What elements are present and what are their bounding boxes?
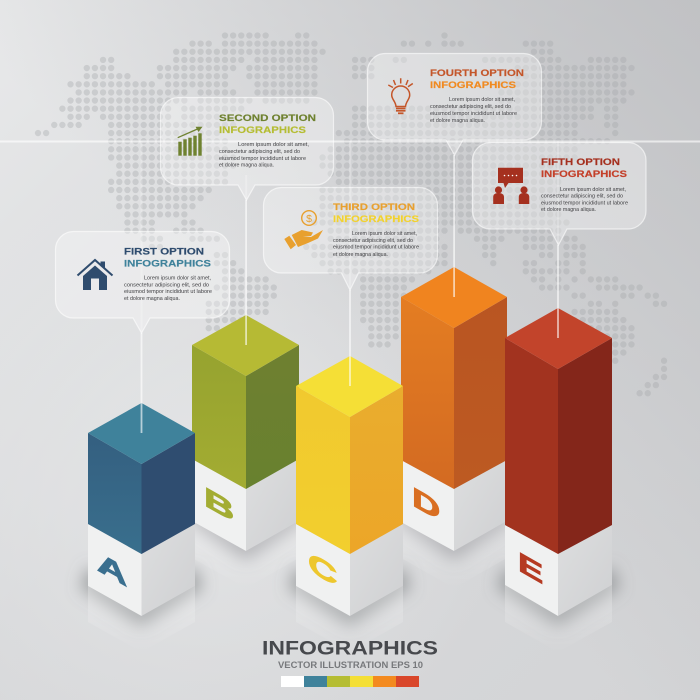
callout: fourth option: Lorem ipsum dolor sit amet,	[449, 97, 515, 103]
callout: fourth option: FOURTH OPTION	[430, 68, 524, 78]
callout: fourth option: et dolore magna aliqua.	[430, 118, 485, 124]
callout: second option: Lorem ipsum dolor sit amet,	[238, 142, 309, 148]
callout: fifth option	[472, 142, 646, 245]
bar A: A	[97, 546, 127, 593]
callout: fifth option: INFOGRAPHICS	[541, 169, 627, 179]
callout: first option: FIRST OPTION	[124, 246, 204, 256]
callout: third option: Lorem ipsum dolor sit amet,	[352, 231, 417, 237]
bar A	[80, 403, 203, 652]
colour strip	[281, 676, 419, 687]
callout: first option	[55, 231, 230, 333]
callout: third option: INFOGRAPHICS	[333, 214, 419, 224]
callout: third option: THIRD OPTION	[333, 202, 415, 212]
callout: fifth option: eiusmod tempor incididunt ut labore	[541, 200, 628, 206]
callout: fifth option: et dolore magna aliqua.	[541, 207, 596, 213]
icon: house	[78, 260, 112, 290]
subtitle: VECTOR ILLUSTRATION EPS 10	[278, 660, 423, 670]
callout: third option: consectetur adipiscing elit, sed do	[333, 238, 413, 244]
callout: first option: INFOGRAPHICS	[124, 258, 211, 268]
bar E	[497, 308, 620, 652]
icon: growth chart	[178, 127, 202, 156]
bar C	[288, 356, 411, 652]
callout: fourth option	[367, 53, 542, 155]
callout: second option: consectetur adipiscing elit, sed do	[219, 149, 300, 155]
callout: second option	[160, 97, 334, 200]
callout: first option: consectetur adipiscing elit, sed do	[124, 282, 209, 288]
callout: fourth option: INFOGRAPHICS	[430, 80, 516, 90]
callout: fourth option: eiusmod tempor incididunt ut labore	[430, 111, 517, 117]
horizontal light line	[0, 140, 700, 142]
icon: light bulb	[388, 78, 413, 113]
callout: first option: et dolore magna aliqua.	[124, 296, 180, 302]
callout: fifth option: FIFTH OPTION	[541, 157, 620, 167]
callout: fifth option: consectetur adipiscing elit, sed do	[541, 194, 623, 200]
bar B: B	[204, 481, 234, 528]
callout: second option: SECOND OPTION	[219, 113, 316, 123]
callout: third option: et dolore magna aliqua.	[333, 252, 388, 258]
vertical connector lines	[140, 141, 559, 433]
bar D: D	[412, 480, 440, 527]
callout: first option: Lorem ipsum dolor sit amet,	[144, 276, 211, 282]
icon: hand holding coin	[284, 211, 323, 249]
callout: third option	[263, 187, 438, 290]
dotted world map	[38, 36, 665, 393]
icon: hand holding coin: $	[306, 213, 312, 225]
bar C: C	[308, 547, 337, 593]
callout: second option: et dolore magna aliqua.	[219, 162, 274, 168]
callout: second option: INFOGRAPHICS	[219, 125, 306, 135]
callout: third option: eiusmod tempor incididunt ut labore	[333, 245, 419, 251]
bar B	[188, 315, 305, 588]
bar D	[397, 267, 513, 588]
callout: fourth option: consectetur adipiscing elit, sed do	[430, 104, 511, 110]
bar E: E	[518, 545, 543, 590]
icon: two people talking	[493, 168, 529, 204]
callout: second option: eiusmod tempor incididunt ut labore	[219, 156, 306, 162]
title: INFOGRAPHICS	[262, 638, 438, 660]
callout: fifth option: Lorem ipsum dolor sit amet,	[560, 187, 626, 193]
callout: first option: eiusmod tempor incididunt ut labore	[124, 289, 212, 295]
